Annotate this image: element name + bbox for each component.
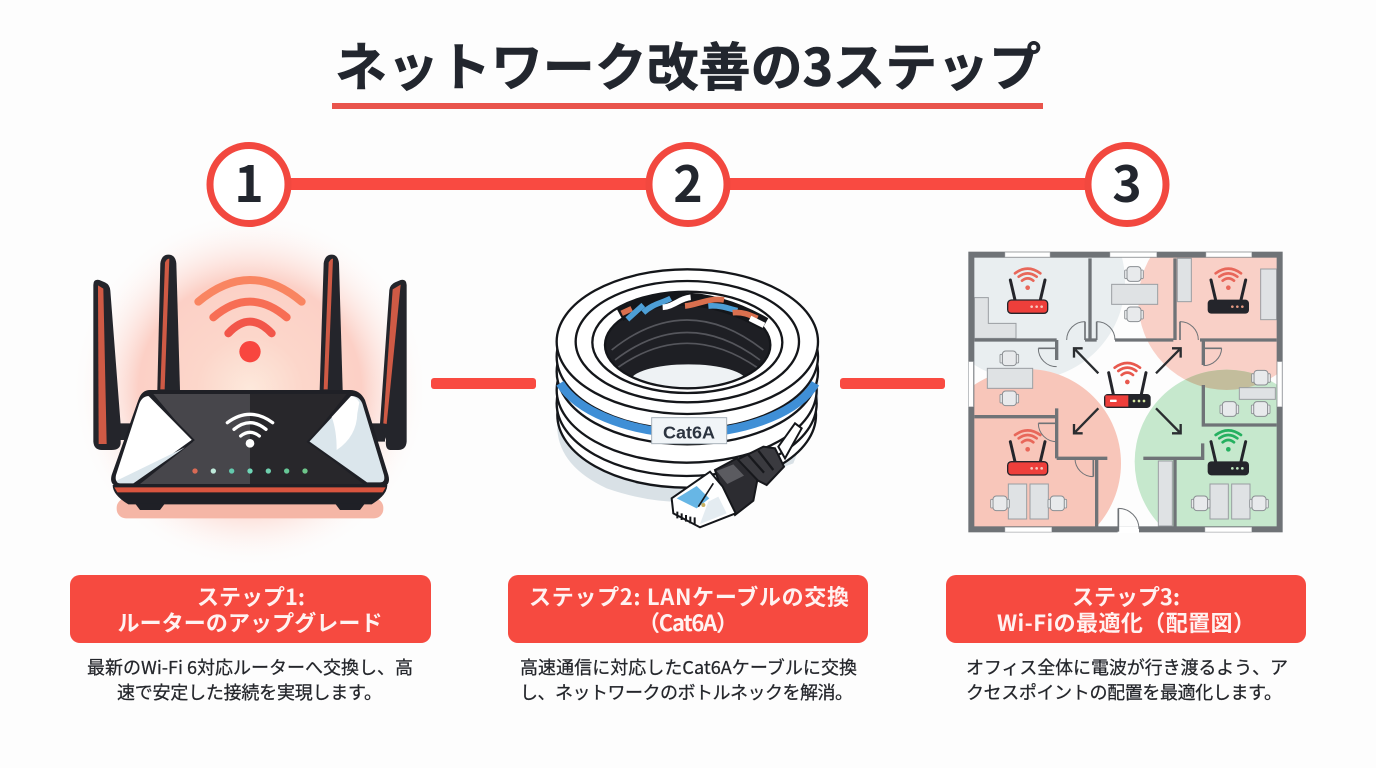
status LEDs — [192, 468, 308, 474]
coil hole — [606, 306, 770, 387]
step 3 description — [966, 654, 1288, 705]
furniture — [974, 258, 1277, 526]
step 1 description: 速で安定した接続を実現します。 — [117, 679, 382, 705]
router body — [111, 390, 389, 487]
step 1 description: 最新のWi-Fi 6対応ルーターへ交換し、高 — [87, 654, 413, 680]
router: top-left room — [1008, 269, 1048, 313]
blue band — [560, 383, 815, 434]
door swings — [1038, 322, 1222, 532]
step 1 heading: ステップ1: — [197, 580, 305, 612]
step 2 description: し、ネットワークのボトルネックを解消。 — [520, 679, 853, 705]
step 3 heading: ステップ3: — [1072, 580, 1180, 612]
Cat6A label — [652, 418, 727, 444]
arrow dash between step 2 and 3 — [840, 378, 945, 389]
step 2 heading: ステップ2: LANケーブルの交換 — [529, 580, 849, 612]
step timeline — [210, 145, 1166, 224]
arrows from access point — [1074, 348, 1181, 433]
step 1 heading: ルーターのアップグレード — [118, 606, 382, 638]
left white panel — [115, 395, 193, 483]
step number 3: 3 — [1112, 145, 1142, 217]
step 3 heading — [946, 575, 1306, 643]
interior walls — [974, 258, 1277, 528]
panel: step 1 text — [70, 575, 431, 705]
chairs — [991, 267, 1270, 511]
router feet — [135, 503, 365, 510]
step 1 heading — [70, 575, 431, 643]
router: centre access point — [1104, 363, 1151, 408]
router: top-right room — [1208, 269, 1249, 314]
step number 1: 1 — [234, 145, 264, 217]
icon: office floor plan — [968, 252, 1283, 532]
title: ネットワーク改善の3ステップ — [335, 26, 1041, 101]
arrow dash between step 1 and 2 — [431, 378, 536, 389]
twisted wires — [620, 297, 765, 325]
router base — [113, 485, 387, 504]
panel: step 3 text — [946, 575, 1306, 705]
right white panel — [308, 395, 385, 483]
step 3 heading: Wi-Fiの最適化（配置図） — [997, 606, 1255, 638]
coil top face — [557, 269, 818, 414]
coil shadow — [557, 363, 818, 502]
panel: step 2 text — [508, 575, 868, 705]
step number 1 — [210, 145, 288, 224]
router: bottom-right room — [1208, 430, 1249, 475]
antennas — [93, 255, 407, 450]
step 3 description: オフィス全体に電波が行き渡るよう、ア — [966, 654, 1288, 680]
step 2 description — [520, 654, 857, 705]
icon: wifi router — [50, 207, 450, 573]
step 3 description: クセスポイントの配置を最適化します。 — [966, 679, 1282, 705]
router: bottom-left room — [1008, 430, 1048, 475]
connector line — [249, 178, 1127, 190]
step number 2: 2 — [673, 145, 703, 217]
windows and door opening — [969, 252, 1282, 533]
Cat6A label: Cat6A — [663, 423, 715, 443]
RJ45 connector — [672, 423, 802, 527]
router shadow — [117, 498, 383, 518]
step 2 heading: （Cat6A） — [638, 606, 738, 638]
step number 3 — [1088, 145, 1166, 224]
title underline — [332, 103, 1043, 109]
white wifi logo — [227, 414, 273, 448]
red wifi signal — [198, 280, 302, 362]
router glow — [50, 207, 450, 573]
exterior walls — [971, 255, 1280, 529]
stacked cable loops — [557, 284, 818, 488]
icon: Cat6A cable coil — [557, 269, 818, 527]
step 1 description — [87, 654, 413, 705]
coverage zones — [974, 258, 1277, 526]
step number 2 — [649, 145, 727, 224]
step 2 heading — [508, 575, 868, 643]
step 2 description: 高速通信に対応したCat6Aケーブルに交換 — [520, 654, 857, 680]
